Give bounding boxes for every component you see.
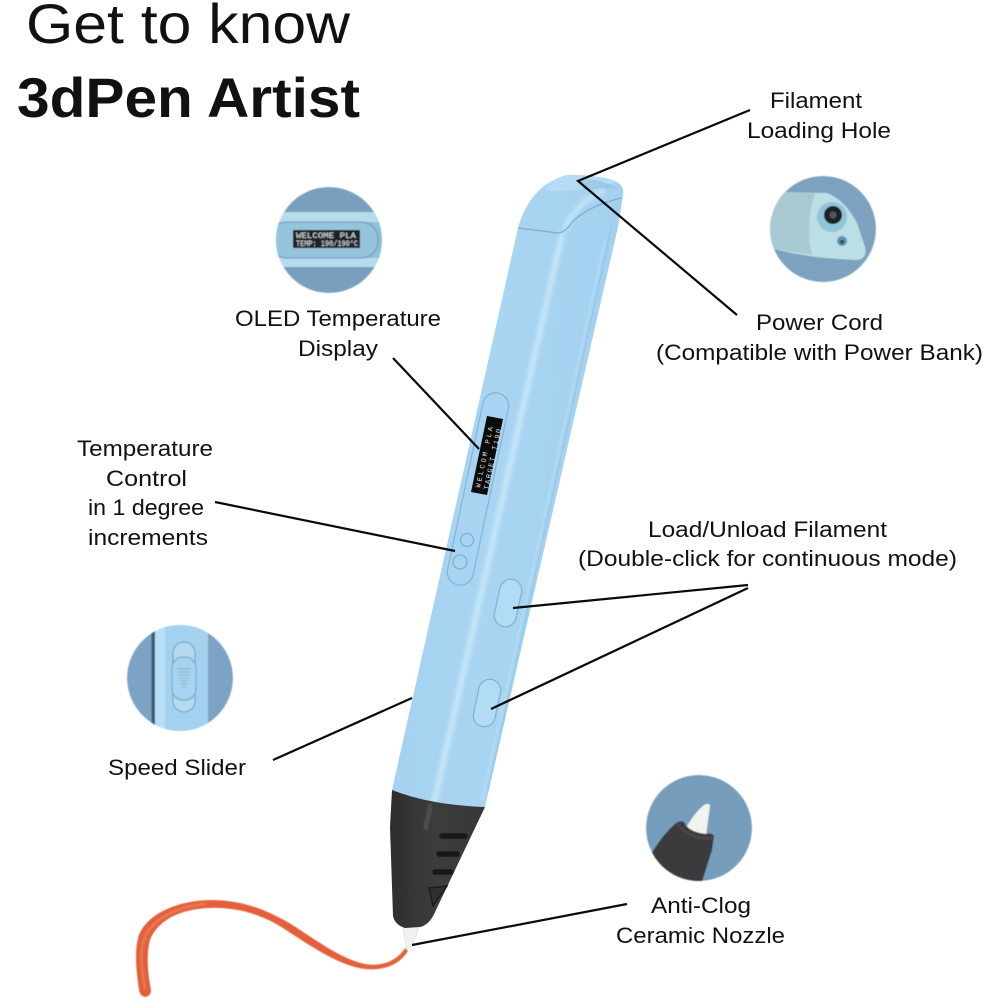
label: speed slider: Speed Slider xyxy=(108,755,246,780)
label: load/unload filament: Load/Unload Filament xyxy=(648,517,887,542)
unload button xyxy=(471,677,503,729)
pen xyxy=(390,165,625,949)
filament strand xyxy=(136,900,408,997)
inset: ceramic nozzle xyxy=(640,775,752,885)
grip logo xyxy=(429,886,447,906)
grip vents xyxy=(435,836,465,872)
label: temperature control xyxy=(77,436,213,550)
label: temperature control: increments xyxy=(88,525,208,550)
grip ridge xyxy=(425,804,431,830)
inset: power port xyxy=(768,176,876,282)
temperature buttons xyxy=(453,534,474,569)
title xyxy=(17,0,360,129)
inset: OLED display xyxy=(270,187,390,293)
inset: speed slider xyxy=(127,620,233,740)
label: filament loading hole: Filament xyxy=(770,88,862,113)
label: power cord: (Compatible with Power Bank) xyxy=(656,340,983,365)
OLED display: TARGET T190 xyxy=(483,428,504,491)
label: temperature control: Control xyxy=(106,466,187,491)
label: OLED temperature display: Display xyxy=(298,336,378,361)
label: power cord xyxy=(656,310,983,365)
black grip xyxy=(390,790,485,928)
label: load/unload filament: (Double-click for continuous mode) xyxy=(578,546,957,571)
label: anti-clog ceramic nozzle xyxy=(616,893,785,948)
label: OLED temperature display: OLED Temperature xyxy=(235,306,441,331)
label: anti-clog ceramic nozzle: Anti-Clog xyxy=(651,893,751,918)
pointer lines xyxy=(215,110,750,945)
pen body xyxy=(392,175,623,807)
OLED display: WELCOM PLA xyxy=(475,426,496,489)
control recess xyxy=(445,390,511,588)
label: temperature control: Temperature xyxy=(77,436,213,461)
label: filament loading hole xyxy=(747,88,891,143)
OLED display xyxy=(471,416,504,495)
label: load/unload filament xyxy=(578,517,957,571)
cap seam xyxy=(518,198,622,233)
load button xyxy=(492,577,524,629)
label: temperature control: in 1 degree xyxy=(88,495,204,520)
label: anti-clog ceramic nozzle: Ceramic Nozzle xyxy=(616,923,785,948)
inset: OLED display: TEMP: 190/190°C xyxy=(296,240,358,249)
title line 2: 3dPen Artist xyxy=(17,66,360,129)
inset: OLED display: WELCOME PLA xyxy=(296,232,356,241)
label: OLED temperature display xyxy=(235,306,441,361)
label: power cord: Power Cord xyxy=(756,310,883,335)
label: filament loading hole: Loading Hole xyxy=(747,118,891,143)
ceramic nozzle xyxy=(403,925,419,949)
pen shading and highlights xyxy=(434,165,625,803)
